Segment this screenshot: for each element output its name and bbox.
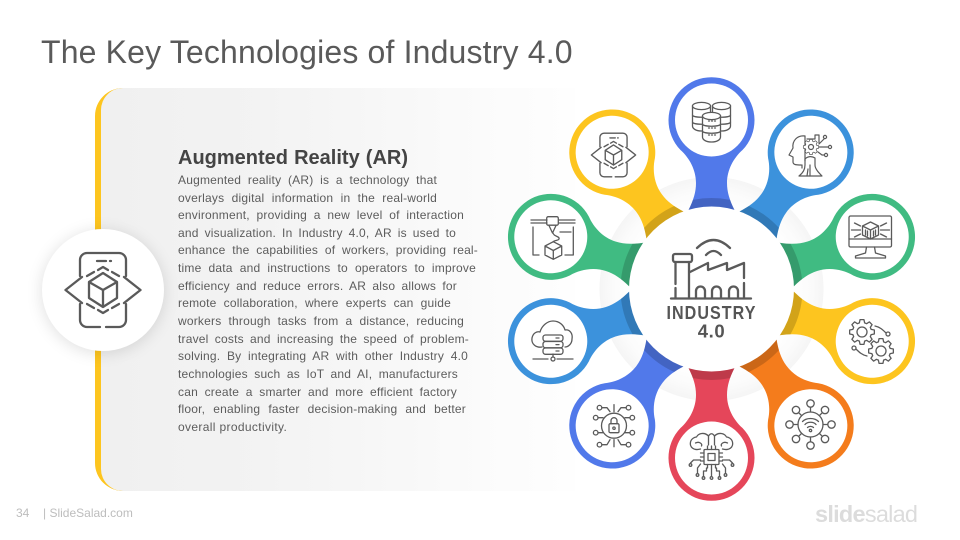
petal: cloud computing (508, 292, 644, 384)
petal: cybersecurity (569, 340, 684, 468)
text block: description: technologies such as IoT and AI, manufacturers (178, 367, 458, 381)
text block: description: Augmented reality (AR) is a technology that (178, 173, 437, 187)
text block: description: enhance the capabilities of workers, providing real- (178, 243, 478, 257)
text block: description: time data and instructions to operators to improve (178, 261, 476, 275)
footer: page number: 34 (16, 506, 29, 520)
petal: brain chip (668, 368, 754, 501)
icon: brain with chip (689, 433, 734, 479)
petal: top data storage (668, 77, 754, 210)
footer: website: | SlideSalad.com (43, 506, 133, 520)
petal: automation gears (780, 292, 916, 384)
heading: Augmented Reality: Augmented Reality (AR) (178, 147, 408, 169)
petal: 3D printing (508, 194, 644, 286)
hub label: version: 4.0 (698, 320, 725, 342)
text block: description: efficiency and reduce errors. AR also allows for (178, 279, 457, 293)
panel: description background (101, 88, 575, 491)
icon: cloud server (532, 321, 573, 361)
logo: slidesalad: slidesalad (815, 501, 917, 527)
text block: description: workers through tasks from a distance, reducing (178, 314, 464, 328)
icon: AI head with gear (789, 135, 832, 176)
text block: description: travel costs and increasing the speed of problem- (178, 332, 469, 346)
icon circle: augmented reality (42, 229, 164, 351)
petal: internet of things (740, 340, 854, 468)
title: The Key Technologies of Industry 4.0 (41, 34, 573, 70)
icon: AR phone (591, 133, 636, 177)
text block: description: can create a smarter and more efficient factory (178, 385, 457, 399)
text block: description: and visualization. In Industry 4.0, AR is used to (178, 226, 456, 240)
text block: description: environment, providing a new level of interaction (178, 208, 464, 222)
hub label: INDUSTRY (667, 302, 756, 323)
text block: description: overlays digital information in the real-world (178, 191, 437, 205)
panel: yellow accent bar (95, 88, 155, 491)
text block: description: overall productivity. (178, 420, 287, 434)
icon: wifi network (786, 400, 835, 449)
diagram: industry 4.0 hub and petals (508, 77, 916, 501)
petal: digital twin monitor (780, 194, 916, 286)
icon: 3D printer (531, 217, 575, 259)
icon: monitor with cube (849, 216, 892, 258)
icon: gears (850, 320, 893, 363)
icon: smart factory (671, 240, 751, 298)
text block: description: floor, enabling faster decision-making and better (178, 402, 466, 416)
petal: artificial intelligence (740, 110, 854, 238)
text block: description: remote collaboration, where experts can guide (178, 296, 451, 310)
text block: description: solving. By integrating AR with other Industry 4.0 (178, 349, 468, 363)
petal: augmented reality (569, 110, 684, 238)
icon: databases (692, 102, 730, 142)
hub: central circle (629, 206, 794, 372)
icon: circuit lock (593, 405, 635, 447)
